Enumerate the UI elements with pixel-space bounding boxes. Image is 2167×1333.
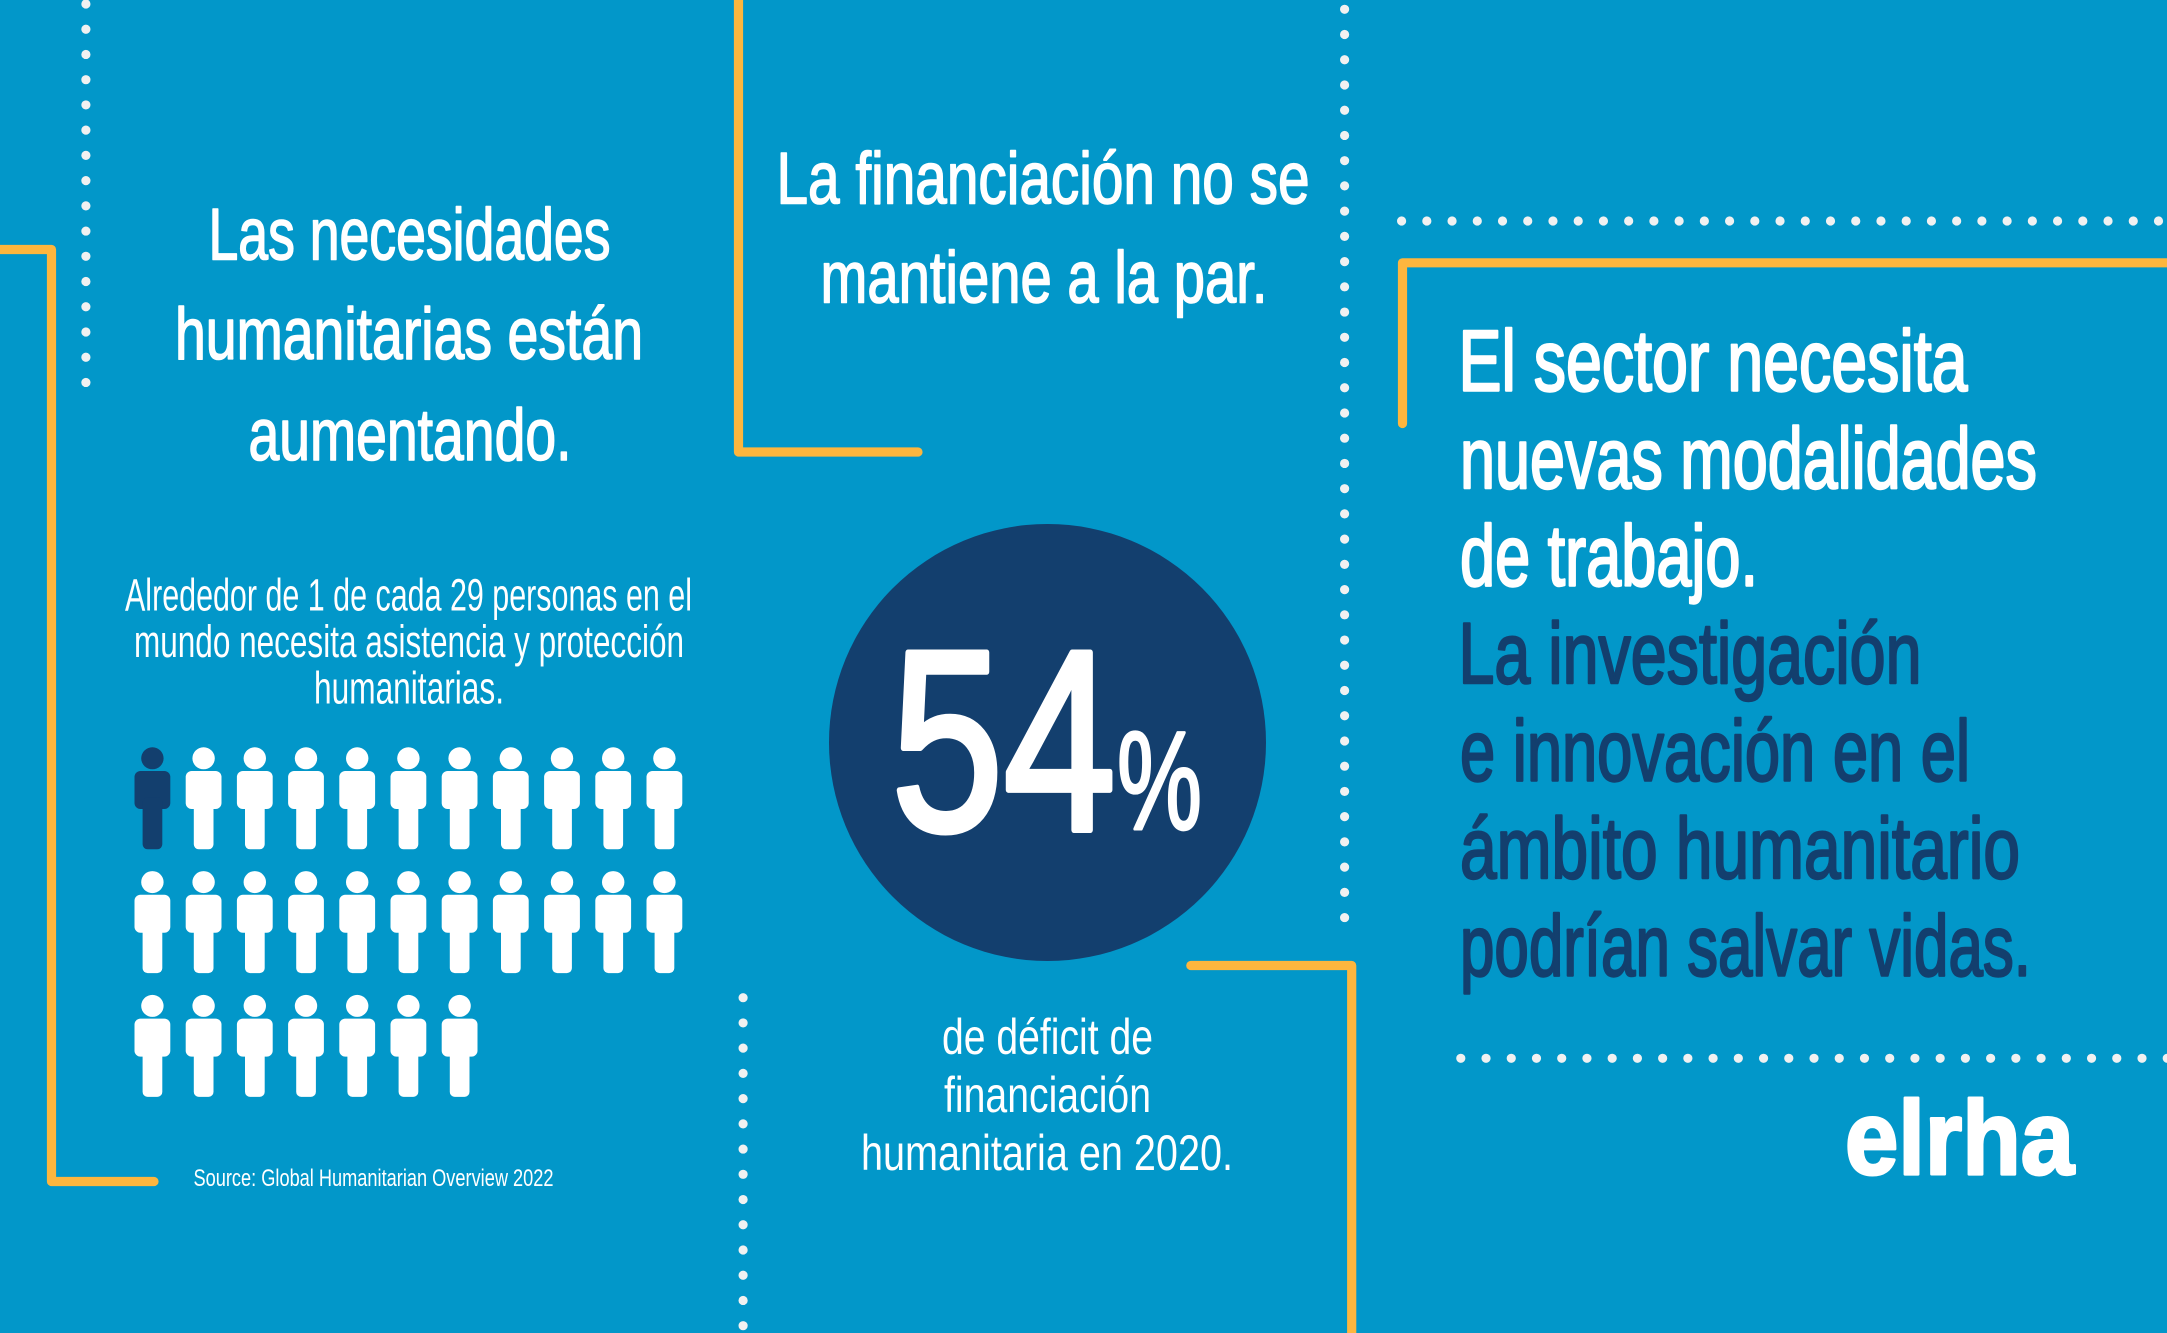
caption: funding shortfall: de déficit de <box>942 1009 1153 1065</box>
heading: needs are increasing: aumentando. <box>248 395 572 476</box>
bracket: centre bottom yellow frame <box>1191 966 1352 1333</box>
heading: funding is not keeping pace: mantiene a la par. <box>820 238 1268 318</box>
caption: funding shortfall: financiación <box>944 1067 1151 1123</box>
stat circle: 54 percent <box>829 524 1266 961</box>
stat circle: 54 percent: 54 <box>891 596 1116 885</box>
bracket: right yellow frame <box>1402 263 2167 424</box>
panel: funding gap <box>776 138 1310 1181</box>
bracket: centre top yellow frame <box>738 0 918 452</box>
text: 1 in 29 people: mundo necesita asistencia y protección <box>134 616 684 667</box>
logo: elrha: elrha <box>1845 1080 2075 1197</box>
caption: funding shortfall <box>861 1009 1233 1181</box>
panel: humanitarian needs <box>125 194 692 1192</box>
text: 1 in 29 people <box>125 570 692 714</box>
icon: highlighted person <box>134 747 170 849</box>
heading: sector needs new ways of working: El sector necesita <box>1458 314 1968 410</box>
heading: funding is not keeping pace: La financiación no se <box>776 138 1310 220</box>
source note: Source: Global Humanitarian Overview 2022 <box>194 1165 554 1192</box>
pictogram: 29 people, one highlighted <box>134 747 682 1097</box>
heading: needs are increasing: humanitarias están <box>175 294 643 375</box>
heading: needs are increasing: Las necesidades <box>208 194 610 276</box>
text: research and innovation can save lives: La investigación <box>1458 606 1922 702</box>
heading: sector needs new ways of working: de trabajo. <box>1460 508 1758 604</box>
heading: funding is not keeping pace <box>776 138 1310 318</box>
text: 1 in 29 people: Alrededor de 1 de cada 29 personas en el <box>125 570 692 620</box>
text: research and innovation can save lives <box>1458 606 2031 994</box>
text: 1 in 29 people: humanitarias. <box>314 662 504 714</box>
bracket: left yellow frame <box>0 250 154 1182</box>
stat circle: 54 percent: % <box>1117 702 1202 859</box>
heading: sector needs new ways of working <box>1458 314 2037 604</box>
panel: new ways of working <box>1458 314 2037 994</box>
heading: needs are increasing <box>175 194 643 476</box>
text: research and innovation can save lives: e innovación en el <box>1460 704 1970 800</box>
caption: funding shortfall: humanitaria en 2020. <box>861 1125 1233 1181</box>
